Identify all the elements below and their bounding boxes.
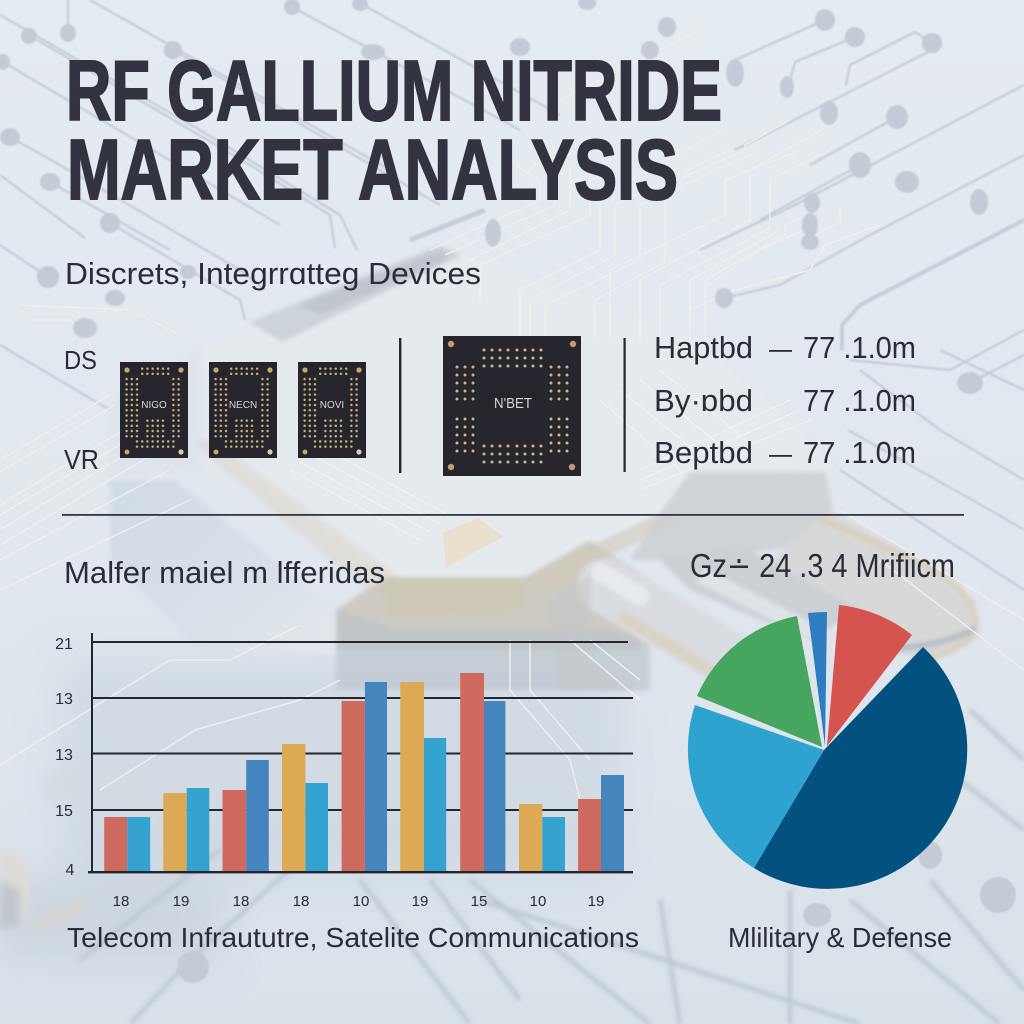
x-axis labels: 19 — [173, 893, 189, 910]
stats list: 77 .1.0m — [803, 435, 916, 470]
y-axis labels: 15 — [55, 803, 73, 820]
light board — [110, 245, 835, 690]
row labels — [64, 345, 99, 475]
bars — [104, 673, 624, 872]
discrete chip 3 — [298, 362, 366, 458]
bar chart — [55, 633, 633, 910]
dark connector on board top — [250, 245, 462, 342]
tan strip beside board — [190, 440, 400, 600]
discrete chip 1: NIGO — [141, 400, 167, 411]
board triangle — [443, 518, 504, 567]
rear circuitry and battery block — [545, 472, 978, 695]
stats list: By·ɒbd — [654, 383, 753, 418]
x-axis labels: 18 — [113, 893, 129, 910]
stats list: Beptbd — [654, 435, 753, 470]
x-axis labels: 18 — [293, 893, 309, 910]
discrete chip 1 — [120, 362, 188, 458]
x-axis labels — [113, 893, 604, 910]
discrete chip 3: NOVI — [320, 400, 344, 411]
title: MARKET ANALYSIS — [67, 123, 678, 218]
x-axis labels: 15 — [471, 893, 487, 910]
horizontal rule — [62, 514, 964, 516]
y-axis labels: 13 — [55, 747, 73, 764]
discrete chip 2: NECN — [229, 400, 257, 411]
lower board edge band — [525, 513, 680, 592]
grid lines and axes — [91, 633, 633, 872]
battery cylinder — [606, 586, 770, 684]
bottom-left blurred part — [0, 770, 160, 930]
integrated chip — [443, 336, 581, 476]
x-axis labels: 10 — [530, 893, 546, 910]
pie chart caption: Mlilitary & Defense — [728, 922, 952, 953]
warm block under board — [336, 540, 640, 650]
y-axis labels — [55, 636, 75, 879]
chart heading: Malfer maiel m lfferidas — [64, 555, 385, 590]
x-axis labels: 19 — [412, 893, 428, 910]
divider left — [399, 338, 401, 473]
row labels: DS — [64, 345, 97, 375]
y-axis labels: 4 — [66, 862, 75, 879]
slice: red — [827, 605, 912, 746]
pie chart — [688, 605, 967, 889]
slice: largest dark blue — [754, 647, 967, 889]
y-axis labels: 13 — [55, 691, 73, 708]
cream trace bundle — [0, 30, 1024, 800]
y-axis labels: 21 — [55, 636, 73, 653]
discrete chip 2 — [209, 362, 277, 458]
stats list: 77 .1.0m — [803, 330, 916, 365]
lower-left slab — [110, 480, 336, 655]
integrated chip: N'BET — [494, 395, 532, 412]
stats list: 77 .1.0m — [803, 383, 916, 418]
row labels: VR — [64, 444, 99, 475]
board micro traces — [290, 370, 810, 540]
blurred foreground traces at bottom — [80, 710, 1024, 1024]
dark block — [336, 610, 650, 690]
stats list: Haptbd — [654, 330, 753, 365]
x-axis labels: 19 — [588, 893, 604, 910]
slice: small blue — [808, 612, 827, 746]
divider right — [624, 338, 626, 472]
slice: light blue — [688, 705, 824, 868]
x-axis labels: 18 — [233, 893, 249, 910]
section heading: devices: Discrets, Integrrɑtteg Devices — [65, 256, 481, 291]
slice: green — [697, 616, 822, 747]
bar chart caption: Telecom Infraututre, Satelite Communications — [67, 922, 639, 953]
title: RF GALLIUM NITRIDE — [66, 44, 722, 139]
stats list — [654, 330, 916, 470]
title — [66, 44, 722, 218]
grey traces — [0, 0, 1024, 590]
pie heading: Gz∸ 24 .3 4 Mrifiicm — [690, 547, 955, 584]
x-axis labels: 10 — [353, 893, 369, 910]
